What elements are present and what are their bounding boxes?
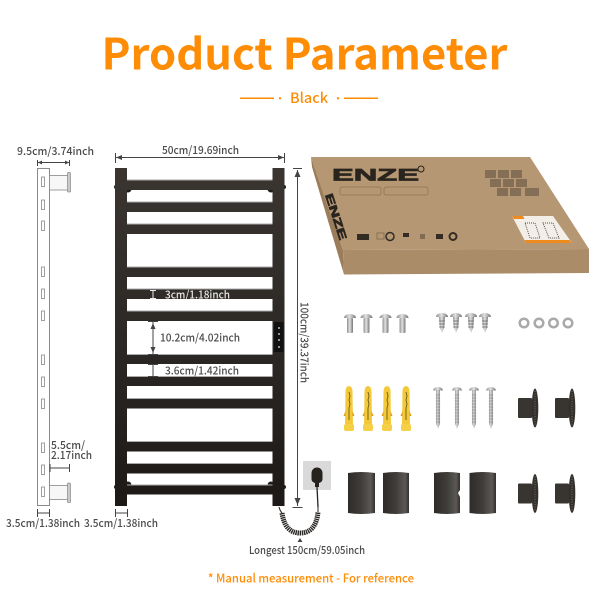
title: Product Parameter	[102, 20, 508, 82]
machine screws	[344, 314, 408, 333]
dimension: side post width: 3.5cm/1.38inch	[6, 515, 80, 531]
dimension: mount offset: 2.17inch	[51, 447, 92, 463]
dimension: total height	[292, 168, 312, 508]
footnote: * Manual measurement - For reference	[208, 570, 414, 586]
left post	[115, 168, 127, 506]
registered mark	[418, 166, 424, 172]
dimension: front post width	[84, 509, 158, 531]
side logo: ENZE	[322, 192, 348, 242]
dimension: large gap: 10.2cm/4.02inch	[160, 330, 240, 346]
feature icon row	[357, 232, 456, 240]
rail brackets	[114, 185, 286, 489]
feature badges	[340, 187, 428, 195]
towel rail front view	[114, 168, 286, 506]
right post	[272, 168, 284, 506]
box left side	[311, 157, 344, 274]
product label	[512, 216, 572, 243]
dimension: rail depth: 9.5cm/3.74inch	[17, 143, 94, 159]
dimension: rung height: 3cm/1.18inch	[165, 286, 230, 302]
rung highlights	[127, 180, 273, 485]
box top	[311, 157, 589, 250]
dimension: mount offset	[50, 437, 92, 472]
wall mounts, lower pair	[518, 474, 575, 513]
box front	[343, 249, 589, 274]
wall mounts, upper pair	[518, 388, 575, 428]
dimension: total width	[116, 142, 284, 163]
rungs	[127, 180, 273, 494]
brand logo: ENZE	[332, 166, 419, 184]
packaging box	[311, 157, 589, 274]
washers	[520, 319, 572, 327]
dimension: side post width	[6, 509, 80, 531]
side view of towel rail	[38, 168, 70, 506]
dimension: small gap: 3.6cm/1.42inch	[165, 362, 239, 378]
subtitle: Black: Black	[290, 88, 328, 108]
care icons	[485, 170, 539, 196]
spacer sleeves	[348, 472, 409, 514]
subtitle: Black	[240, 88, 378, 108]
dimension: total width: 50cm/19.69inch	[162, 142, 239, 158]
cord length label: Longest 150cm/59.05inch	[249, 542, 365, 558]
notched sleeves	[434, 472, 496, 514]
dimension: rail depth	[17, 143, 94, 166]
dimension: total height: 100cm/39.37inch	[296, 302, 312, 383]
dimension: front post width: 3.5cm/1.38inch	[84, 515, 158, 531]
dimension: large gap	[148, 322, 240, 354]
wall plugs	[344, 386, 412, 431]
wall socket and coiled power cord	[279, 461, 331, 542]
long screws	[433, 387, 496, 429]
dimension: mount offset: 5.5cm/	[51, 437, 86, 453]
control panel	[274, 322, 284, 352]
short self-tapping screws	[436, 313, 491, 333]
